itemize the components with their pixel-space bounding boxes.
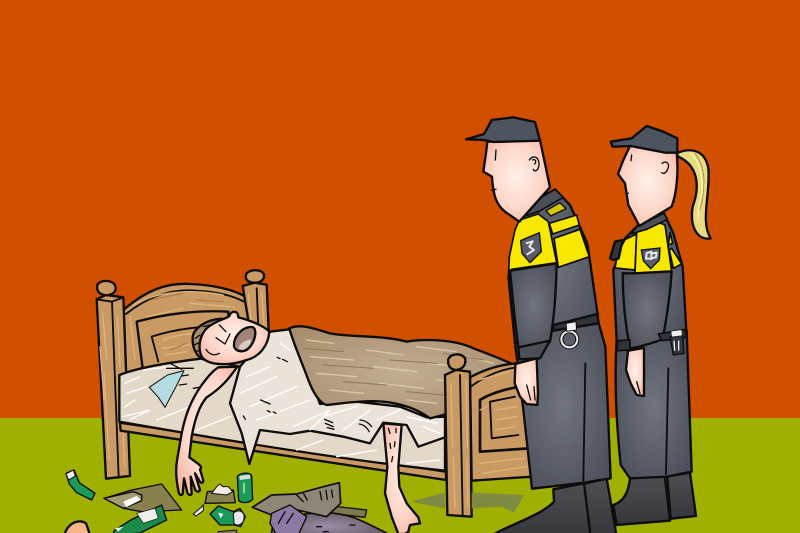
cap	[611, 126, 677, 153]
trousers	[616, 331, 692, 478]
sleeve	[510, 263, 557, 347]
floor litter	[64, 470, 524, 533]
skin object bottom left	[64, 521, 91, 533]
female officer	[610, 126, 711, 525]
hand	[515, 358, 538, 405]
open mouth	[234, 327, 255, 351]
rug shadow	[411, 493, 524, 513]
police badge	[641, 248, 660, 269]
shard	[193, 505, 203, 516]
cap	[466, 117, 540, 142]
olive newspaper	[104, 484, 182, 512]
pillow corner	[167, 363, 207, 388]
cuff	[518, 341, 550, 359]
boots	[490, 478, 617, 533]
torso	[508, 189, 598, 343]
hi-vis panels	[615, 222, 682, 273]
police badge	[521, 233, 541, 263]
crushed green can	[210, 506, 245, 527]
torch holster	[670, 330, 684, 355]
sleeve	[623, 271, 672, 349]
handcuffs	[561, 322, 577, 347]
boots	[613, 473, 696, 525]
upright green can	[237, 473, 253, 503]
belt	[553, 314, 599, 331]
collar	[631, 213, 667, 234]
shoulder rank tag	[546, 203, 566, 216]
clothes pile	[252, 483, 387, 533]
white sheet	[230, 329, 445, 464]
hi-vis shoulder bands	[509, 214, 589, 272]
hand	[626, 348, 644, 396]
ponytail	[677, 150, 711, 239]
male officer	[466, 117, 617, 533]
belt	[617, 329, 687, 351]
right head bed post	[243, 270, 269, 330]
small hand-shaped wrapper	[205, 484, 235, 503]
background: green floor	[0, 418, 800, 533]
tan blanket	[289, 326, 513, 418]
trousers	[515, 318, 611, 489]
left bed post	[97, 281, 130, 479]
police officers	[466, 117, 711, 533]
background: orange wall	[0, 0, 800, 419]
green can far left	[66, 470, 95, 500]
body camera	[610, 240, 623, 260]
head	[618, 146, 677, 226]
bed and sleeping man	[64, 270, 532, 533]
mattress	[119, 358, 445, 471]
blue tissue	[149, 371, 184, 407]
man head	[193, 312, 269, 364]
headboard	[123, 284, 250, 373]
man arm and hand	[176, 367, 237, 495]
head	[483, 140, 550, 222]
bed frame rail	[120, 423, 446, 480]
foot bed post and footboard	[445, 354, 532, 517]
torso	[613, 213, 687, 342]
collar	[521, 189, 563, 217]
distant olive scrap	[218, 530, 237, 533]
man leg and foot	[383, 423, 420, 533]
green bottle	[113, 505, 167, 533]
